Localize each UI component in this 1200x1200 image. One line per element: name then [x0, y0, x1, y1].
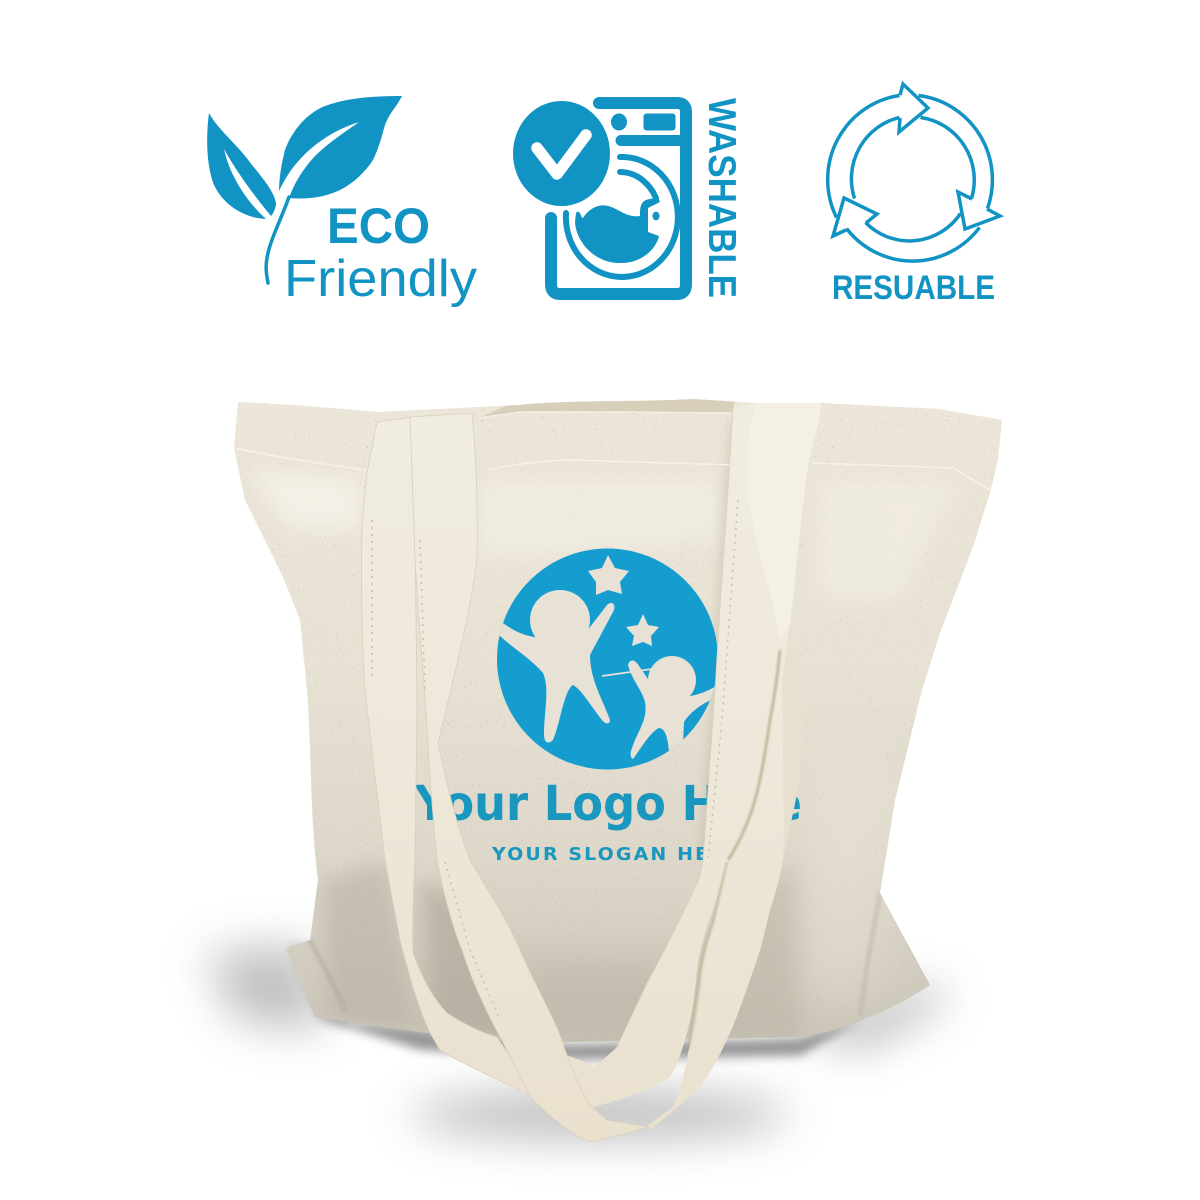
bag body	[234, 399, 1002, 1042]
printed logo	[414, 548, 802, 865]
right strap: fold highlight	[747, 403, 822, 640]
slogan: YOUR SLOGAN HERE	[491, 844, 742, 865]
left strap front layer	[410, 413, 650, 1142]
right strap: band and loop	[647, 403, 822, 1130]
icon: check circle	[512, 100, 611, 207]
tote bag	[230, 395, 1010, 1145]
strap gap shadow	[728, 650, 780, 860]
star large	[588, 555, 629, 595]
right strap inner piece joining the bottom loop	[500, 860, 728, 1108]
label: ECO: ECO	[327, 198, 430, 254]
ground shadows	[205, 942, 950, 1139]
strap stitching	[372, 500, 738, 1020]
logo circle with figures	[497, 548, 718, 770]
right strap outer edge line	[617, 408, 733, 1047]
right strap rear layer	[770, 630, 803, 860]
icon: washable machine badge	[512, 98, 743, 298]
label: RESUABLE: RESUABLE	[832, 269, 995, 307]
star small	[626, 614, 659, 646]
icon: eco friendly leaf badge	[207, 96, 477, 308]
wordmark: Your Logo Here	[414, 776, 802, 832]
label: WASHABLE: WASHABLE	[700, 98, 743, 298]
label: Friendly: Friendly	[284, 250, 477, 308]
icon: reusable recycle arrows badge	[828, 84, 1000, 307]
left strap back layer	[362, 417, 540, 1100]
